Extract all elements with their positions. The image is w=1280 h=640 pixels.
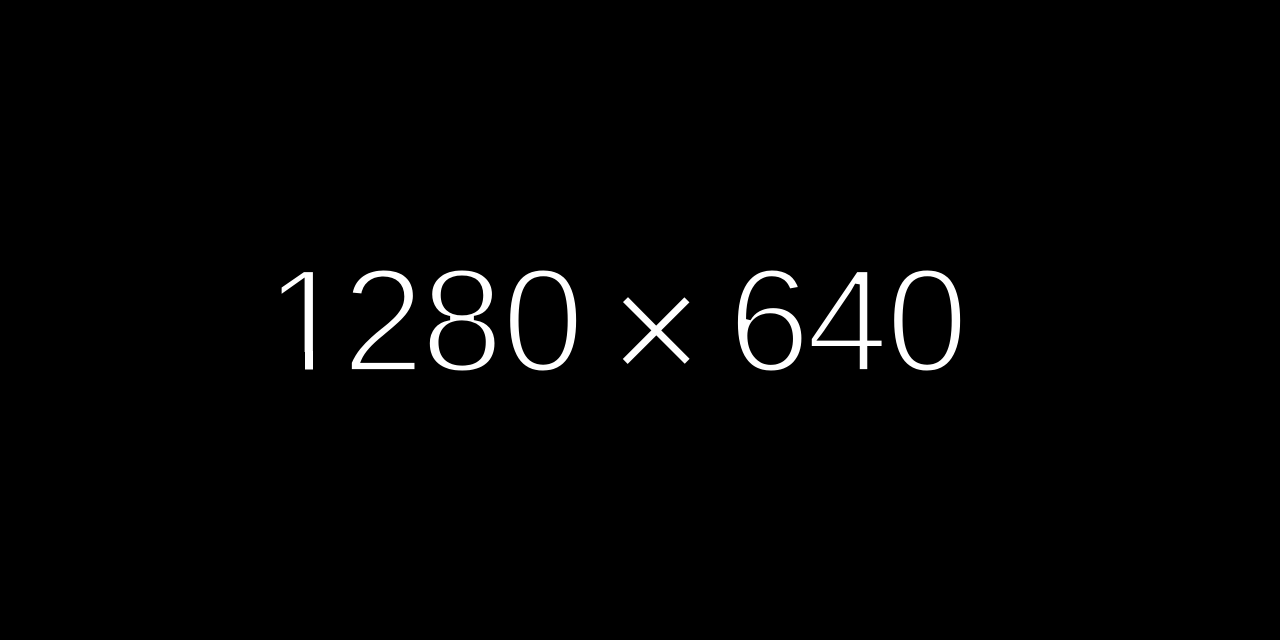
- title: dimensions text: 640: [700, 238, 968, 404]
- title: dimensions text: [260, 236, 968, 420]
- title: dimensions text: 1280: [265, 238, 626, 404]
- title: dimensions text: ×: [608, 236, 704, 420]
